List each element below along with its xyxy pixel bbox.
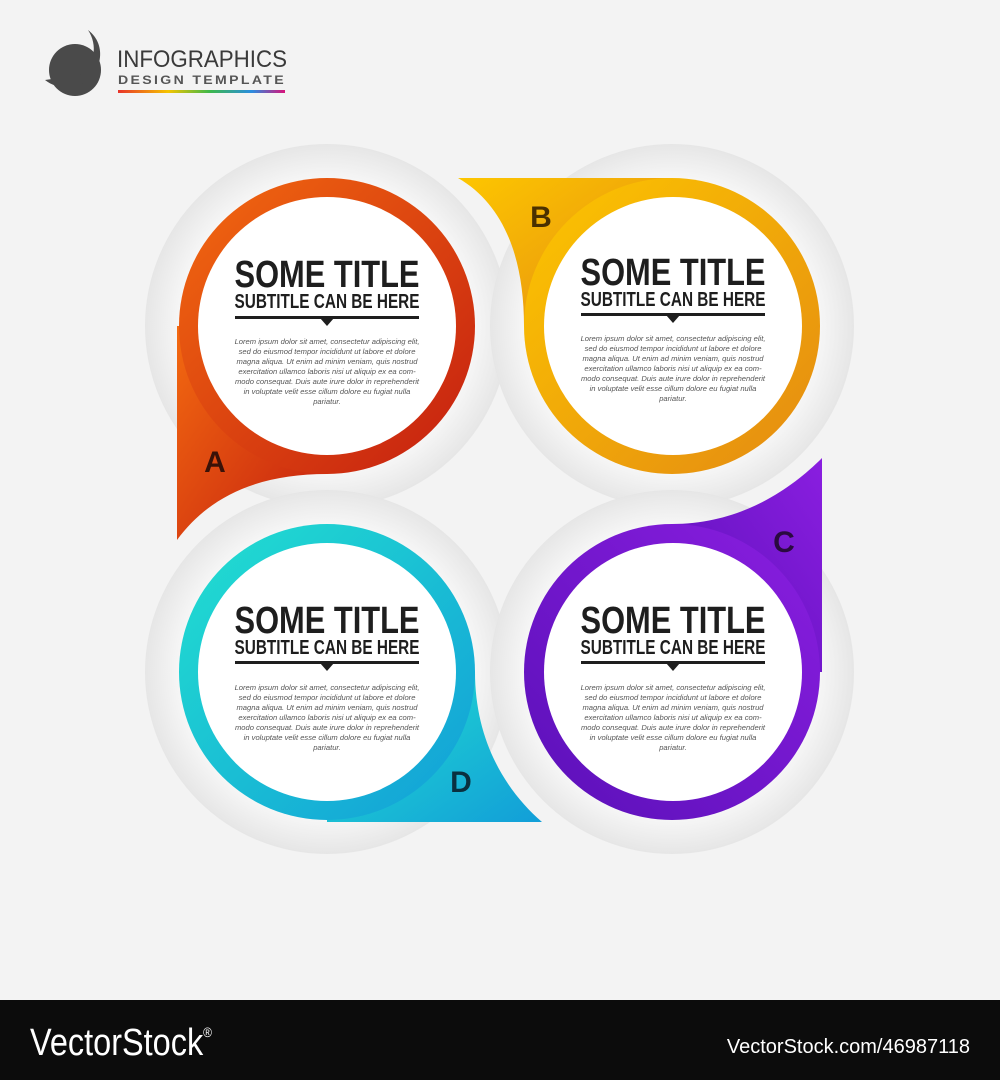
panel A: exercitation ullamco laboris nisi ut aliquip ex ea com- xyxy=(238,367,416,376)
footer bar: VectorStock xyxy=(30,1022,233,1064)
panel B: Lorem ipsum dolor sit amet, consectetur adipiscing elit, xyxy=(581,334,765,343)
panel B xyxy=(458,178,820,474)
panel D: SOME TITLE xyxy=(234,600,420,642)
panel A: SUBTITLE CAN BE HERE xyxy=(234,291,420,313)
logo: DESIGN TEMPLATE xyxy=(118,73,286,87)
panel C xyxy=(524,458,822,820)
panel A: magna aliqua. Ut enim ad minim veniam, quis nostrud xyxy=(236,357,418,366)
panel A: SOME TITLE xyxy=(234,254,420,296)
panel B: exercitation ullamco laboris nisi ut aliquip ex ea com- xyxy=(584,364,762,373)
panel C: magna aliqua. Ut enim ad minim veniam, quis nostrud xyxy=(582,703,764,712)
panel C: SUBTITLE CAN BE HERE xyxy=(580,637,766,659)
panel A: modo consequat. Duis aute irure dolor in reprehenderit xyxy=(235,377,420,386)
panel A: in voluptate velit esse cillum dolore eu fugiat nulla xyxy=(244,387,410,396)
panel C: exercitation ullamco laboris nisi ut aliquip ex ea com- xyxy=(584,713,762,722)
panel D: in voluptate velit esse cillum dolore eu fugiat nulla xyxy=(244,733,410,742)
panel B: modo consequat. Duis aute irure dolor in reprehenderit xyxy=(581,374,766,383)
panel C: pariatur. xyxy=(658,743,687,752)
logo: INFOGRAPHICS xyxy=(117,46,287,73)
panel D: pariatur. xyxy=(312,743,341,752)
panel B: B xyxy=(530,201,552,234)
panel A: A xyxy=(204,446,226,479)
panel C: sed do eiusmod tempor incididunt ut labore et dolore xyxy=(585,693,761,702)
footer bar: VectorStock.com/46987118 xyxy=(727,1036,970,1058)
backdrop circles xyxy=(145,144,854,854)
footer bar xyxy=(0,1000,1000,1080)
panel A xyxy=(177,178,475,540)
panel B: SUBTITLE CAN BE HERE xyxy=(580,289,766,311)
panel B: pariatur. xyxy=(658,394,687,403)
panel D: modo consequat. Duis aute irure dolor in reprehenderit xyxy=(235,723,420,732)
panel A: pariatur. xyxy=(312,397,341,406)
panel D: D xyxy=(450,766,472,799)
panel D: exercitation ullamco laboris nisi ut aliquip ex ea com- xyxy=(238,713,416,722)
panel B: in voluptate velit esse cillum dolore eu fugiat nulla xyxy=(590,384,756,393)
panel B: magna aliqua. Ut enim ad minim veniam, quis nostrud xyxy=(582,354,764,363)
panel D xyxy=(179,524,542,822)
panel D: Lorem ipsum dolor sit amet, consectetur adipiscing elit, xyxy=(235,683,419,692)
panel B: sed do eiusmod tempor incididunt ut labore et dolore xyxy=(585,344,761,353)
panel C: modo consequat. Duis aute irure dolor in reprehenderit xyxy=(581,723,766,732)
panel D: sed do eiusmod tempor incididunt ut labore et dolore xyxy=(239,693,415,702)
panel C: Lorem ipsum dolor sit amet, consectetur adipiscing elit, xyxy=(581,683,765,692)
logo xyxy=(45,30,287,96)
panel C: in voluptate velit esse cillum dolore eu fugiat nulla xyxy=(590,733,756,742)
panel D: SUBTITLE CAN BE HERE xyxy=(234,637,420,659)
panel A: Lorem ipsum dolor sit amet, consectetur adipiscing elit, xyxy=(235,337,419,346)
panel B: SOME TITLE xyxy=(580,252,766,294)
panel C: C xyxy=(773,526,795,559)
panel C: SOME TITLE xyxy=(580,600,766,642)
panel D: magna aliqua. Ut enim ad minim veniam, quis nostrud xyxy=(236,703,418,712)
footer bar: ® xyxy=(203,1024,213,1040)
panel A: sed do eiusmod tempor incididunt ut labore et dolore xyxy=(239,347,415,356)
